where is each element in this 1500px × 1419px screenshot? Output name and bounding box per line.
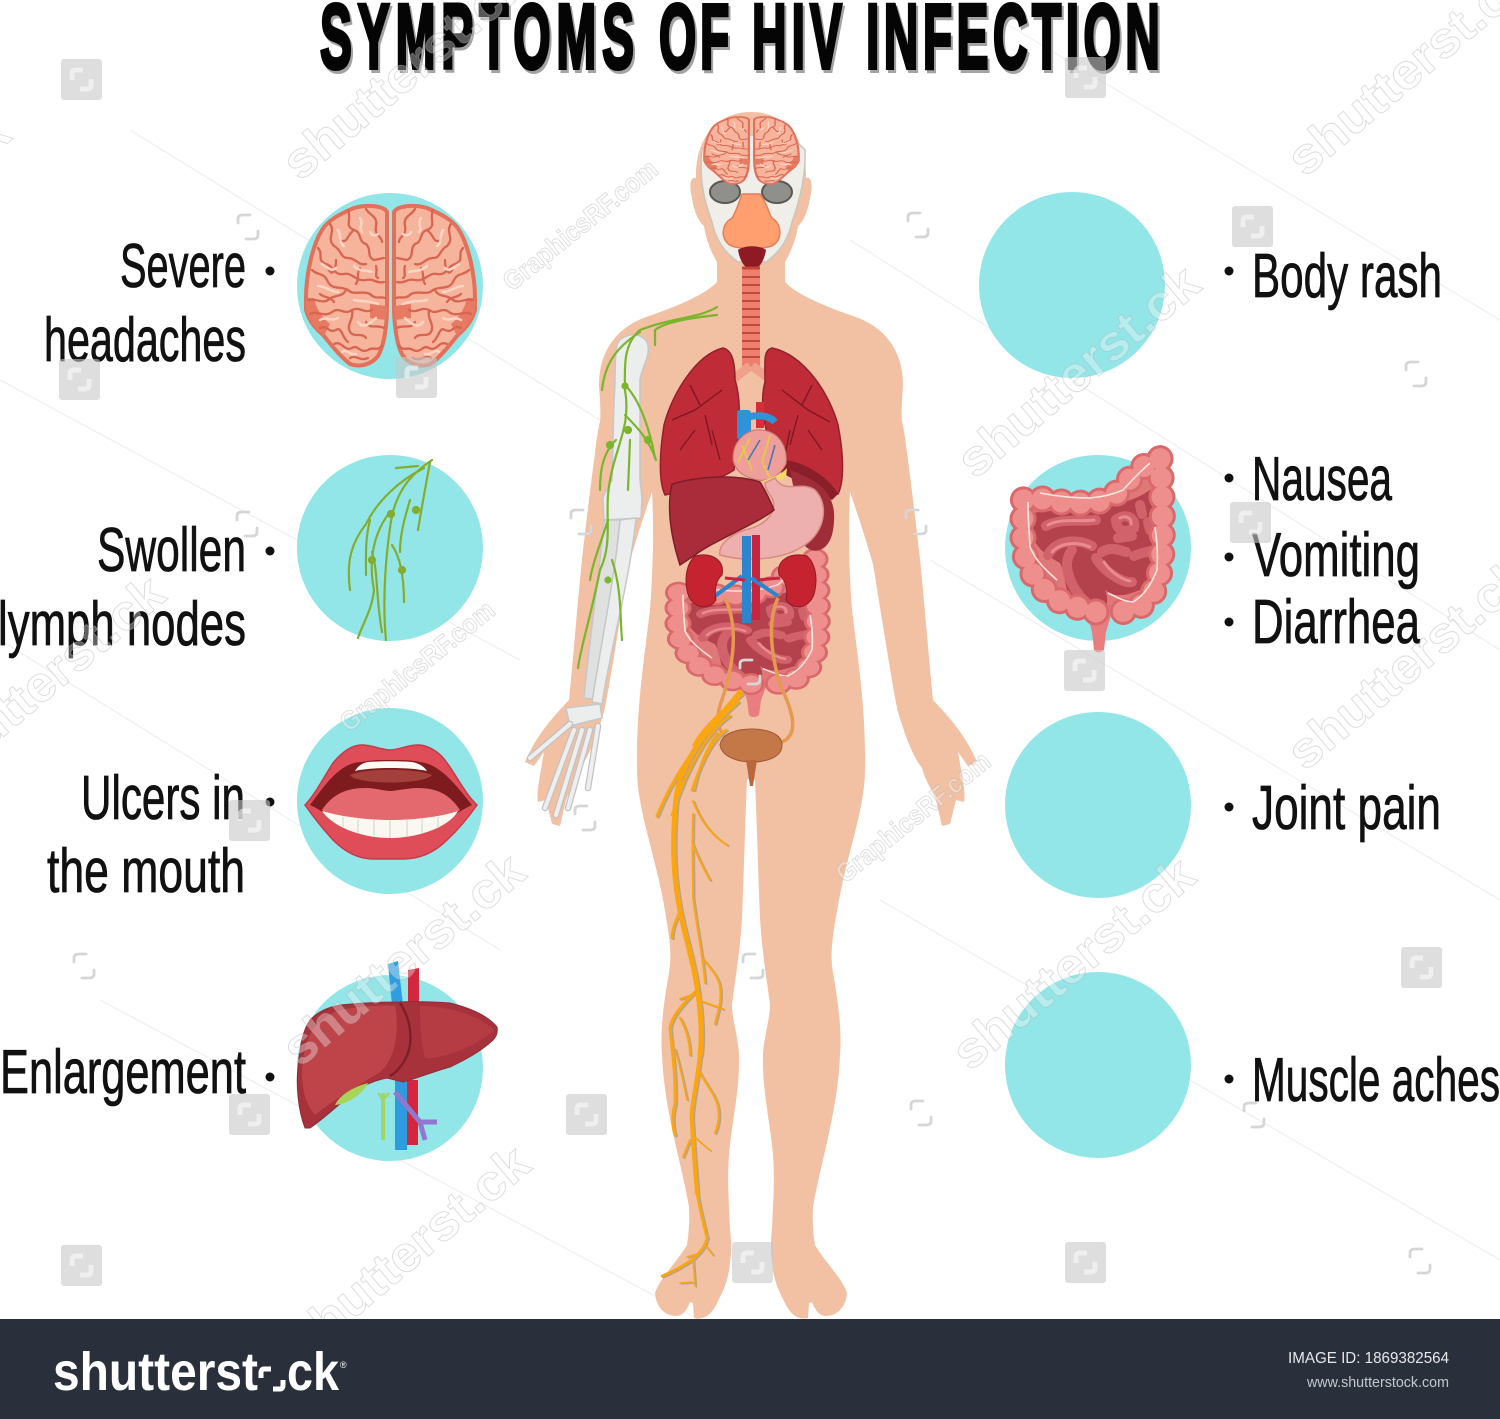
icon circle: digestive symptoms (1005, 455, 1191, 641)
bladder (720, 729, 782, 786)
panel: nausea vomiting diarrhea (1005, 445, 1420, 657)
nasal cavity (723, 194, 780, 248)
label: swollen lymph nodes: Swollen (97, 516, 246, 585)
hand bones (530, 724, 598, 815)
panel: severe headaches (44, 193, 483, 379)
label: nausea vomiting diarrhea: Diarrhea (1252, 588, 1420, 657)
panel: enlargement of the liver (0, 961, 497, 1161)
stomach (720, 470, 834, 559)
footer website: www.shutterstock.com (1306, 1375, 1449, 1391)
label: severe headaches: Severe (120, 232, 246, 301)
icon: brain (306, 206, 475, 366)
label: severe headaches: headaches (44, 306, 246, 375)
left lung (660, 348, 739, 495)
aorta and vena cava (715, 535, 780, 623)
heart (733, 402, 787, 482)
label: nausea vomiting diarrhea: Nausea (1252, 445, 1392, 514)
icon circle: enlargement (297, 975, 483, 1161)
ureters (718, 598, 793, 742)
label: ulcers in the mouth: the mouth (47, 837, 245, 906)
brain (704, 117, 799, 184)
footer logo: shutterst (53, 1342, 258, 1402)
label: severe headaches (44, 232, 274, 375)
panel: body rash (979, 192, 1442, 378)
footer logo: ck (287, 1342, 340, 1402)
left kidney (686, 555, 722, 607)
arm skeleton (566, 335, 648, 726)
footer logo: ® (340, 1360, 347, 1370)
label: enlargement: Enlargement (0, 1038, 246, 1107)
label: ulcers in the mouth (47, 764, 274, 906)
title (320, 0, 1162, 91)
body silhouette (525, 112, 977, 1318)
liver (670, 477, 774, 565)
lymphatic vessels on arm (578, 307, 717, 668)
skull (701, 135, 805, 262)
right lung (763, 348, 843, 494)
bronchi (722, 366, 782, 388)
icon: liver (297, 961, 497, 1150)
intestines (678, 559, 820, 717)
icon circle: joint pain (1005, 712, 1191, 898)
watermark layer: shutterst.ck (276, 1134, 540, 1368)
panel: joint pain (1005, 712, 1441, 898)
trachea (742, 268, 760, 368)
watermark layer: shutterst.ck (946, 254, 1210, 488)
panel: muscle aches (1005, 972, 1500, 1158)
icon: mouth (305, 745, 477, 859)
bronchial veins (672, 385, 830, 460)
label: nausea vomiting diarrhea: Vomiting (1252, 521, 1420, 590)
eye sockets (710, 181, 792, 203)
throat (738, 246, 766, 270)
icon circle: ulcers in the mouth (297, 708, 483, 894)
nerves (657, 692, 744, 1287)
label: nausea vomiting diarrhea (1224, 445, 1420, 657)
panel: swollen lymph nodes (0, 455, 483, 659)
watermark layer: GraphicsRF.com (830, 746, 996, 889)
label: swollen lymph nodes: lymph nodes (0, 590, 246, 659)
panel: ulcers in the mouth (47, 708, 483, 906)
icon circle: body rash (979, 192, 1165, 378)
label: body rash (1224, 242, 1442, 311)
footer bar (0, 1319, 1500, 1419)
central figure: human body (525, 112, 977, 1318)
icon circle: muscle aches (1005, 972, 1191, 1158)
watermark layer: GraphicsRF.com (497, 154, 663, 297)
icon circle: swollen lymph nodes (297, 455, 483, 641)
footer image id: IMAGE ID: 1869382564 (1288, 1350, 1449, 1367)
watermark layer: shutterst.ck (271, 842, 535, 1076)
icon: lymph vessels (349, 460, 432, 640)
watermark layer: shutterst.ck (941, 846, 1205, 1080)
icon: intestines (1023, 458, 1165, 652)
right kidney (779, 555, 816, 607)
label: ulcers in the mouth: Ulcers in (81, 764, 245, 833)
icon circle: severe headaches (297, 193, 483, 379)
lung shadow (780, 460, 838, 500)
watermark layer: GraphicsRF.com (334, 595, 500, 738)
label: swollen lymph nodes (0, 516, 274, 659)
label: joint pain (1224, 774, 1441, 843)
